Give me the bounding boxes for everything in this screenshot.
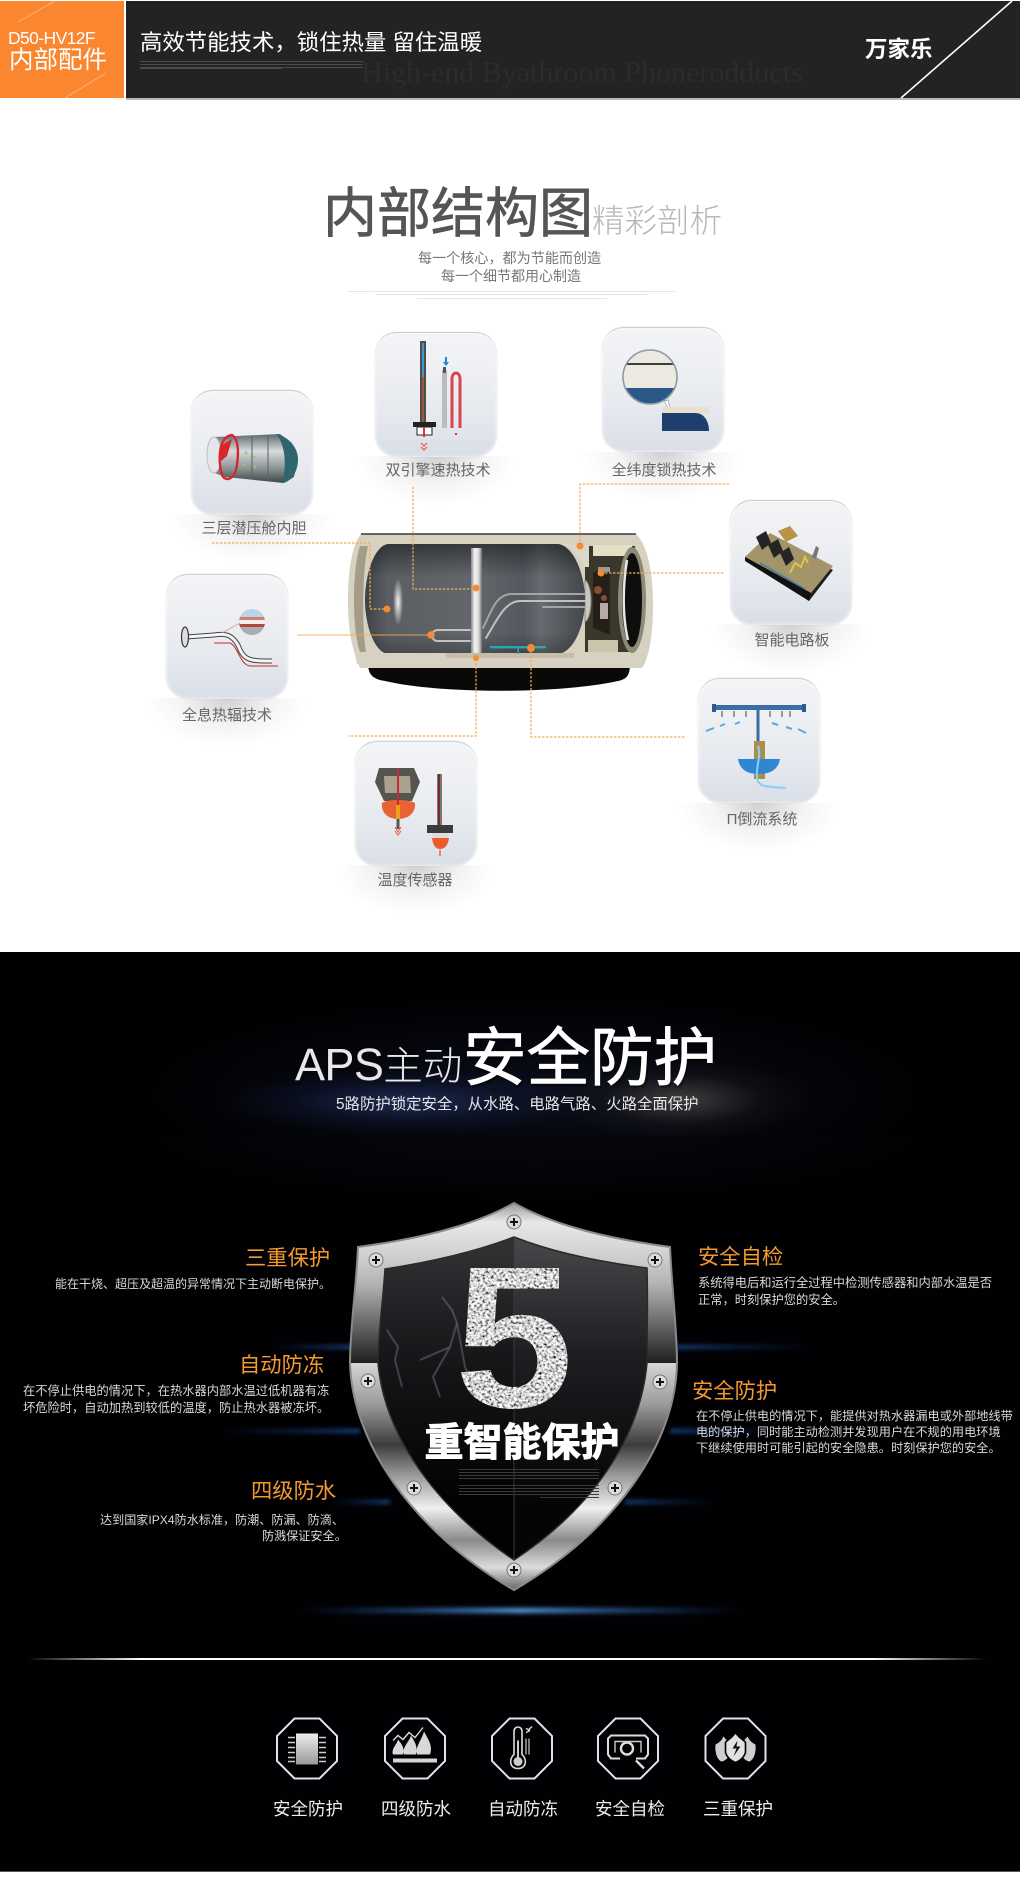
right compartment bbox=[585, 546, 635, 652]
icon row bbox=[276, 1718, 766, 1780]
left feature: 三重保护: 三重保护 bbox=[245, 1246, 330, 1270]
pipes bbox=[432, 594, 585, 641]
right feature: 安全自检: 正常，时刻保护您的安全。 bbox=[698, 1292, 845, 1306]
left feature: 四级防水: 达到国家IPX4防水标准，防潮、防漏、防滴、 bbox=[100, 1513, 344, 1527]
beige shell bbox=[348, 534, 653, 668]
tiny caption bbox=[348, 291, 675, 294]
label: 全息热辐技术 bbox=[182, 707, 272, 724]
card: 双引擎速热技术 bbox=[374, 332, 498, 490]
icon: chip bbox=[277, 1718, 337, 1778]
leader lines and dots bbox=[212, 483, 729, 738]
brand name: 万家乐 bbox=[865, 37, 933, 62]
left feature: 自动防冻: 在不停止供电的情况下，在热水器内部水温过低机器有冻 bbox=[23, 1384, 329, 1398]
title light part: APS主动 bbox=[295, 1039, 462, 1090]
subtitle lines: 每一个核心，都为节能而创造 bbox=[418, 250, 601, 266]
icon: thermometer bbox=[492, 1718, 552, 1778]
tiny caption bbox=[459, 1469, 599, 1498]
dark title band bbox=[126, 1, 1020, 100]
right feature: 安全防护 bbox=[692, 1379, 1013, 1455]
shield emblem bbox=[349, 1202, 678, 1591]
slanted top housing bbox=[560, 544, 589, 567]
left feature: 三重保护: 能在干烧、超压及超温的异常情况下主动断电保护。 bbox=[55, 1277, 331, 1291]
card panel with circuit board icon bbox=[730, 500, 852, 625]
icon: inspection bbox=[598, 1718, 658, 1778]
divider column bbox=[471, 548, 482, 653]
header headline: 高效节能技术，锁住热量 留住温暖 bbox=[140, 30, 482, 55]
label: 温度传感器 bbox=[377, 872, 452, 889]
right feature: 安全自检 bbox=[698, 1245, 992, 1306]
tiny caption lines bbox=[140, 61, 363, 68]
caption 4: 安全自检 bbox=[595, 1799, 665, 1819]
icon captions bbox=[273, 1799, 773, 1819]
card panel with sensor icon bbox=[355, 741, 477, 866]
lightning bbox=[387, 1297, 472, 1397]
label: 三层潜压舱内胆 bbox=[201, 520, 306, 537]
card panel with pipe icon bbox=[166, 574, 288, 699]
divider line bbox=[27, 1658, 987, 1660]
card panel with backflow icon bbox=[698, 678, 820, 803]
dark panel: APS safety bbox=[0, 952, 1020, 1872]
section heading: structure: 每一个细节都用心制造 bbox=[441, 268, 581, 284]
orange model badge: 内部配件 bbox=[9, 47, 107, 74]
left feature: 自动防冻: 自动防冻 bbox=[239, 1353, 324, 1377]
orange model badge: D50-HV12F bbox=[8, 28, 95, 48]
caption 1: 安全防护 bbox=[273, 1799, 343, 1819]
screws bbox=[361, 1215, 667, 1577]
title suffix: 精彩剖析 bbox=[592, 203, 722, 239]
dark face bbox=[378, 1237, 647, 1560]
white diagonal stroke bbox=[900, 1, 1012, 98]
main title: 内部结构图 bbox=[323, 184, 593, 244]
right feature: 安全防护: 在不停止供电的情况下，能提供对热水器漏电或外部地线带 bbox=[696, 1409, 1013, 1423]
card panel with heating rods icon bbox=[375, 332, 497, 457]
left feature: 三重保护 bbox=[55, 1246, 331, 1291]
black base bbox=[368, 663, 630, 691]
right feature: 安全自检: 系统得电后和运行全过程中检测传感器和内部水温是否 bbox=[698, 1276, 992, 1290]
subtitle: 5路防护锁定安全，从水路、电路气路、火路全面保护 bbox=[336, 1096, 699, 1113]
right feature: 安全防护: 安全防护 bbox=[692, 1379, 777, 1403]
orange model badge bbox=[0, 1, 124, 98]
left feature: 四级防水: 防溅保证安全。 bbox=[262, 1529, 347, 1543]
faded english watermark: High-end Byathroom Phonerodducts bbox=[361, 56, 803, 89]
tray bbox=[355, 653, 645, 664]
section heading: APS bbox=[295, 1024, 717, 1113]
right feature: 安全防护: 电的保护，同时能主动检测并发现用户在不规的用电环境 bbox=[696, 1425, 1001, 1439]
right feature: 安全防护: 下继续使用时可能引起的安全隐患。时刻保护您的安全。 bbox=[696, 1441, 1001, 1455]
label: 智能电路板 bbox=[754, 632, 830, 649]
icon: triple protection bbox=[706, 1718, 766, 1778]
card panel with tank icon bbox=[191, 390, 313, 515]
card: 温度传感器 bbox=[354, 740, 478, 900]
blue light streaks bbox=[236, 1342, 794, 1616]
night sky backdrop bbox=[150, 972, 920, 1192]
ground silhouette bbox=[150, 1136, 920, 1196]
silver rim bbox=[350, 1203, 677, 1590]
label: 全纬度锁热技术 bbox=[611, 462, 716, 479]
card: 全息热辐技术 bbox=[166, 574, 288, 732]
card: 智能电路板 bbox=[730, 500, 852, 658]
steel tank bbox=[365, 544, 585, 654]
header bar bbox=[0, 1, 1020, 100]
caption 2: 四级防水 bbox=[381, 1799, 451, 1819]
section heading: structure bbox=[323, 184, 722, 299]
card: 全纬度锁热技术 bbox=[602, 326, 724, 486]
left feature: 自动防冻: 坏危险时，自动加热到较低的温度，防止热水器被冻坏。 bbox=[23, 1400, 329, 1414]
teal sensor bar bbox=[490, 646, 546, 648]
numeral 5: 5 bbox=[454, 1225, 574, 1451]
icon: flames bbox=[385, 1718, 445, 1778]
caption 3: 自动防冻 bbox=[488, 1799, 558, 1819]
water heater cutaway bbox=[348, 533, 653, 691]
label: 双引擎速热技术 bbox=[385, 462, 490, 479]
left feature: 自动防冻 bbox=[23, 1353, 329, 1414]
重智能保护: 重智能保护 bbox=[424, 1412, 620, 1468]
title bold part: 安全防护 bbox=[463, 1024, 717, 1094]
card: Π倒流系统 bbox=[698, 678, 820, 837]
card: 三层潜压舱内胆 bbox=[190, 390, 314, 548]
caption 5: 三重保护 bbox=[703, 1799, 773, 1819]
right feature: 安全自检: 安全自检 bbox=[698, 1245, 783, 1269]
label: Π倒流系统 bbox=[727, 811, 797, 828]
card panel with magnifier icon bbox=[602, 327, 724, 452]
left feature: 四级防水: 四级防水 bbox=[251, 1479, 336, 1503]
left feature: 四级防水 bbox=[100, 1479, 347, 1543]
